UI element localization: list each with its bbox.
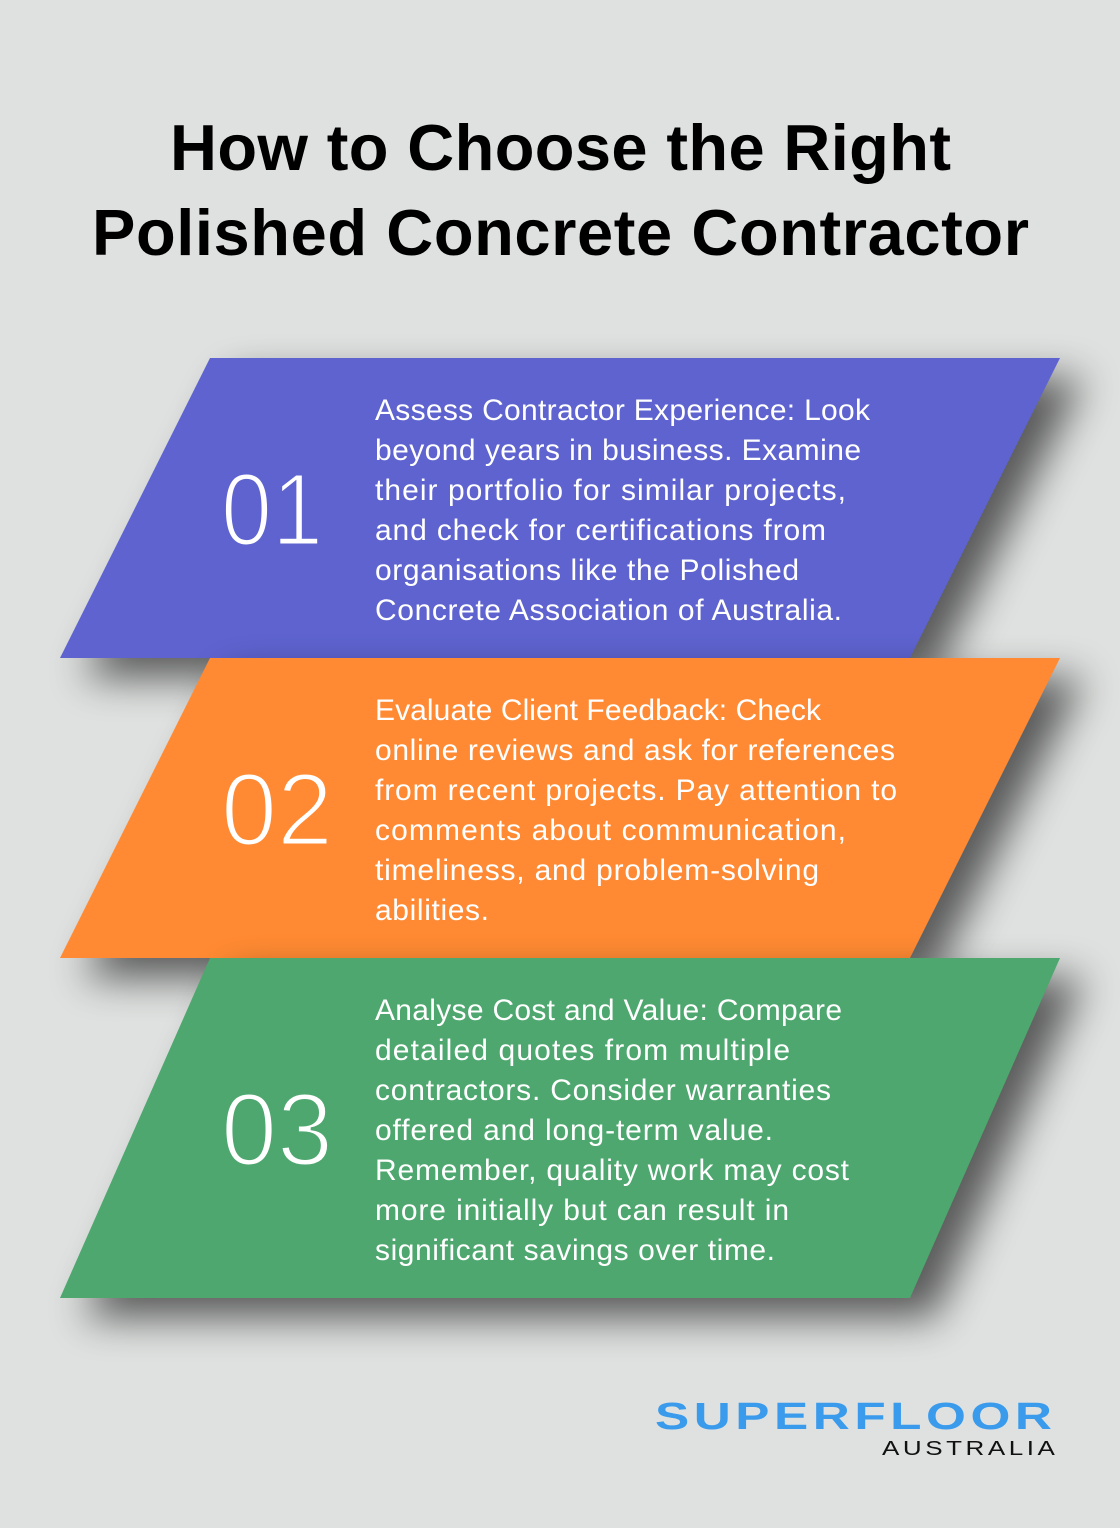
panel: step 1 assess experience bbox=[60, 358, 1084, 678]
logo: Superfloor Australia bbox=[655, 1394, 1055, 1459]
text: step 1 description bbox=[375, 394, 871, 627]
text: step 3 description: detailed quotes from multiple bbox=[375, 1034, 790, 1067]
text: step 1 description: organisations like the Polished bbox=[375, 554, 799, 587]
text: step 1 description: their portfolio for similar projects, bbox=[375, 474, 846, 507]
title bbox=[92, 111, 1029, 269]
title: Polished Concrete Contractor bbox=[92, 196, 1029, 269]
text: step 1 description: Concrete Association of Australia. bbox=[375, 594, 842, 627]
text: step 2 description: from recent projects. Pay attention to bbox=[375, 774, 897, 807]
text: step 3 description: contractors. Consider warranties bbox=[375, 1074, 831, 1107]
text: step 2 description: Evaluate Client Feedback: Check bbox=[375, 694, 822, 727]
text: step 2 description: online reviews and ask for references bbox=[375, 734, 895, 767]
text: step 3 description bbox=[375, 994, 850, 1267]
text: step 3 description: Analyse Cost and Value: Compare bbox=[375, 994, 842, 1027]
number 02: 02 bbox=[221, 752, 333, 867]
text: step 3 description: more initially but can result in bbox=[375, 1194, 789, 1227]
text: step 2 description: timeliness, and problem-solving bbox=[375, 854, 819, 887]
text: step 3 description: offered and long-term value. bbox=[375, 1114, 773, 1147]
title: How to Choose the Right bbox=[170, 111, 951, 184]
text: step 2 description: abilities. bbox=[375, 894, 489, 927]
text: step 2 description: comments about communication, bbox=[375, 814, 846, 847]
panel: step 2 client feedback bbox=[60, 658, 1084, 978]
number 01: 01 bbox=[221, 452, 323, 567]
text: step 2 description bbox=[375, 694, 897, 927]
text: step 1 description: Assess Contractor Experience: Look bbox=[375, 394, 871, 427]
logo: Superfloor Australia: SUPERFLOOR bbox=[655, 1394, 1052, 1437]
logo: Superfloor Australia: AUSTRALIA bbox=[882, 1437, 1055, 1459]
text: step 3 description: Remember, quality work may cost bbox=[375, 1154, 850, 1187]
text: step 3 description: significant savings over time. bbox=[375, 1234, 775, 1267]
number 03: 03 bbox=[221, 1072, 333, 1187]
panel: step 3 cost and value bbox=[60, 958, 1084, 1318]
text: step 1 description: beyond years in business. Examine bbox=[375, 434, 861, 467]
text: step 1 description: and check for certifications from bbox=[375, 514, 826, 547]
